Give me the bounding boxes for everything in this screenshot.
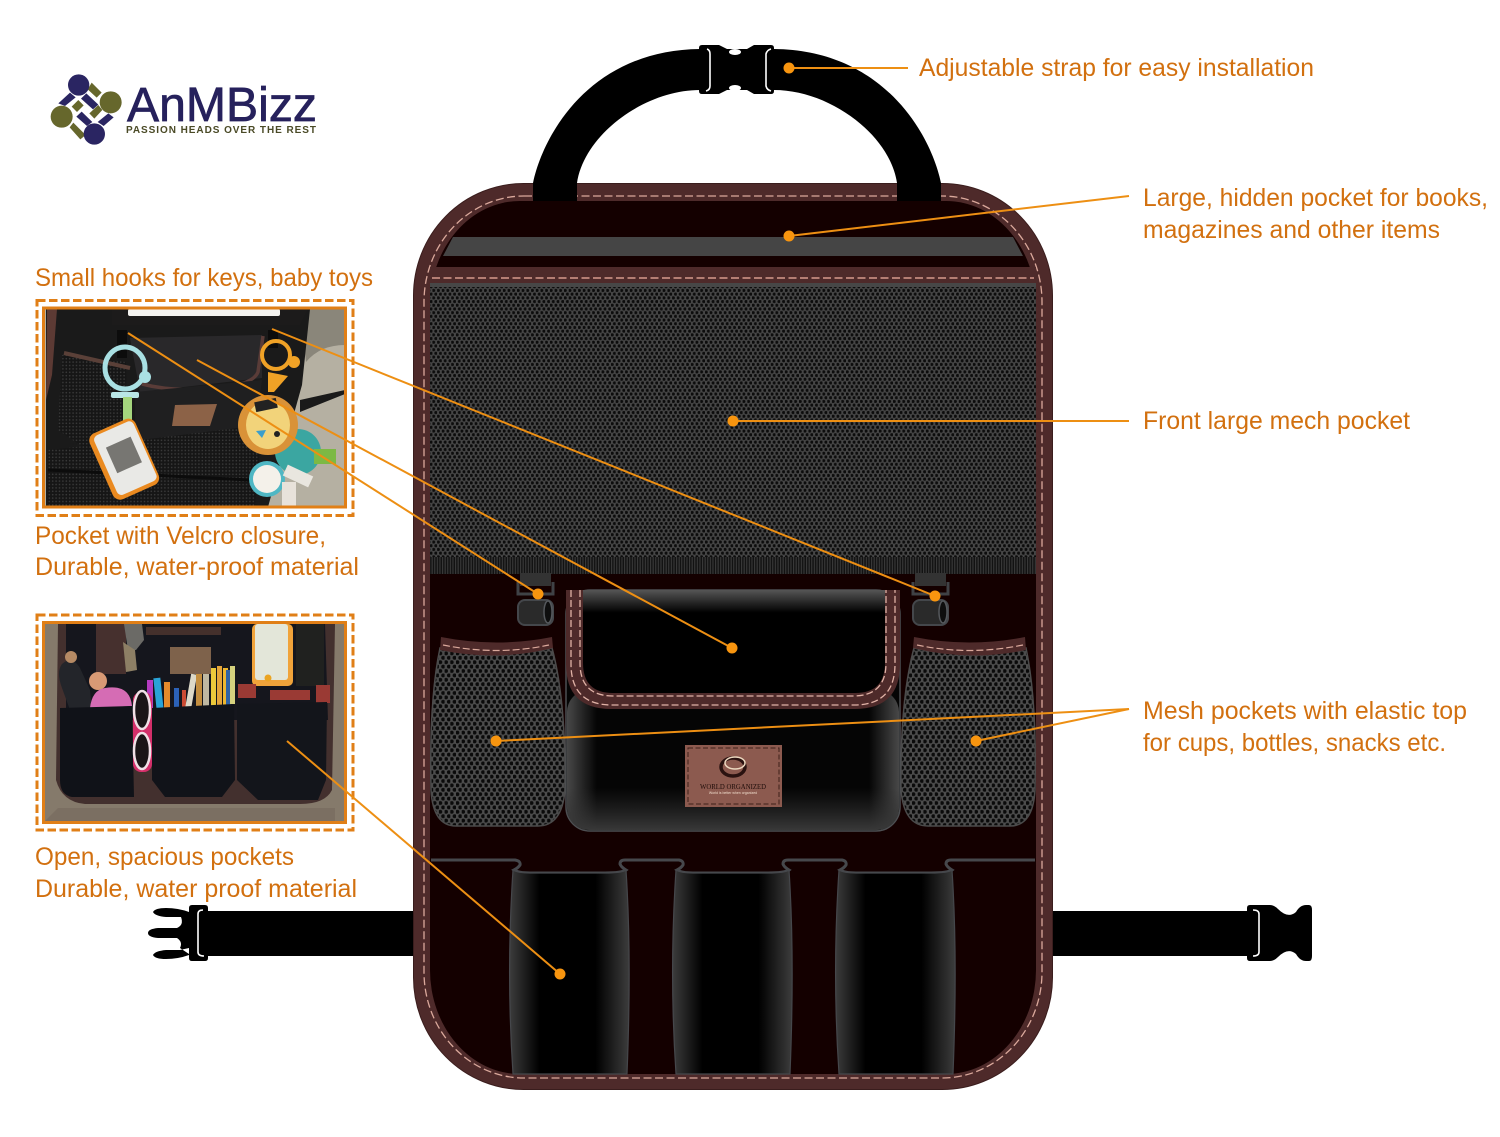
brand patch: WORLD ORGANIZED	[700, 782, 767, 791]
label: open pockets: Open, spacious pockets	[35, 843, 294, 871]
top handle strap	[533, 45, 941, 201]
callout lines and dots	[128, 62, 1129, 980]
pocket 3	[836, 870, 955, 1074]
label: front mesh: Front large mech pocket	[1143, 407, 1410, 435]
callout: hidden pocket	[784, 196, 1129, 242]
hidden pocket zip strip	[443, 237, 1023, 256]
lower open pockets	[431, 860, 1035, 1074]
label: velcro: Pocket with Velcro closure,	[35, 522, 326, 550]
logo: AnMBizz	[51, 74, 317, 145]
label: strap: Adjustable strap for easy installation	[919, 54, 1314, 82]
pocket 2	[673, 870, 792, 1074]
logo tagline: PASSION HEADS OVER THE REST	[126, 125, 316, 136]
brown tag in photo	[172, 404, 217, 426]
label: hidden pocket	[1143, 184, 1488, 244]
labels	[35, 54, 1488, 903]
center velcro pocket	[566, 590, 900, 831]
callout: front mesh	[728, 416, 1129, 426]
callout: open pockets	[287, 741, 566, 980]
brand patch	[685, 745, 782, 807]
left side strap with buckle	[148, 905, 415, 961]
organizer board	[414, 184, 1052, 1090]
photo callout: open pockets	[37, 615, 353, 830]
brand patch: World is better when organized	[709, 791, 757, 795]
label: mesh pockets	[1143, 697, 1467, 757]
logo name: AnMBizz	[127, 79, 317, 132]
pocket flap	[566, 590, 900, 709]
top buckle	[699, 45, 774, 94]
label: hooks: Small hooks for keys, baby toys	[35, 264, 373, 292]
front large mesh pocket	[430, 283, 1036, 558]
right hook	[913, 573, 948, 625]
brown tag in photo 2	[170, 647, 211, 674]
callout: left hook	[128, 333, 544, 600]
label: mesh pockets: for cups, bottles, snacks etc.	[1143, 729, 1446, 757]
right side strap with buckle	[1051, 905, 1312, 961]
callout: right hook	[272, 329, 940, 602]
zipper	[430, 557, 1036, 574]
board border	[414, 184, 1052, 1090]
upper brown band	[430, 267, 1036, 283]
left mesh pocket	[431, 637, 565, 826]
label: open pockets	[35, 843, 357, 903]
label: velcro: Durable, water-proof material	[35, 553, 359, 581]
logo mark	[51, 74, 122, 145]
label: open pockets: Durable, water proof material	[35, 875, 357, 903]
label: velcro	[35, 522, 359, 581]
left hook	[518, 573, 553, 625]
pocket 1	[510, 870, 629, 1074]
label: hidden pocket: Large, hidden pocket for books,	[1143, 184, 1488, 212]
callout: strap	[784, 62, 908, 74]
right mesh pocket	[901, 637, 1035, 826]
callout: velcro pocket	[197, 360, 738, 654]
board inner panel	[430, 201, 1036, 1074]
label: hidden pocket: magazines and other items	[1143, 216, 1440, 244]
label: mesh pockets: Mesh pockets with elastic top	[1143, 697, 1467, 725]
photo callout: hooks	[37, 300, 353, 516]
callout: mesh pockets	[490, 709, 1129, 746]
